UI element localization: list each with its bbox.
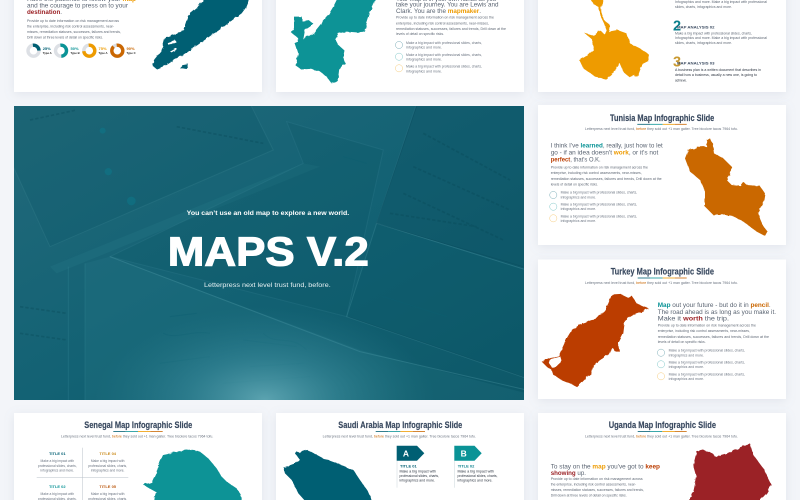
analysis 03: MAP ANALYSIS 03 xyxy=(677,60,715,65)
bullet list: infographics and more. xyxy=(561,207,596,211)
bullet list: Make a big impact with professional slides, charts, xyxy=(561,203,637,207)
item: title 04: TITLE 04 xyxy=(99,451,117,456)
bullet list: infographics and more. xyxy=(669,377,704,381)
item: title 04 xyxy=(88,451,127,472)
body text: enterprise, including risk control assessments, near-misses, xyxy=(551,171,642,175)
bullet list: infographics and more. xyxy=(406,46,442,50)
analysis 02: slides, charts, infographics and more. xyxy=(675,41,732,45)
quote text: Make it worth the trip. xyxy=(658,316,729,323)
analysis 02: Infographics and more. Make a big impact with professional xyxy=(675,36,767,40)
tag: A with title 01: TITLE 01 xyxy=(400,464,417,469)
tag: B with title 02 xyxy=(454,446,498,488)
tag: A with title 01: infographics and more. xyxy=(400,479,435,483)
hero subtitle: Letterpress next level trust fund, before. xyxy=(204,282,331,289)
analysis 03: detail how a business, usually a new one, is going to xyxy=(675,73,757,77)
bullet list: infographics and more. xyxy=(669,365,704,369)
bullet list: Make a big impact with professional slides, charts, xyxy=(669,349,745,353)
item: title 04: Make a big impact with xyxy=(91,459,125,463)
quote text: destination. xyxy=(27,9,62,16)
analysis 03: 3 xyxy=(673,54,681,70)
item: title 05: TITLE 05 xyxy=(99,484,117,489)
map: Turkey xyxy=(542,294,648,387)
bullet list: infographics and more. xyxy=(406,69,442,73)
subtitle: Letterpress next level trust fund, before they sold out +1 man gaiter. Tree bicolore tacos 7964 tofu. xyxy=(323,434,476,438)
item: title 01: TITLE 01 xyxy=(49,451,66,456)
body text xyxy=(551,477,644,498)
map: Senegal xyxy=(143,450,243,500)
bullet list xyxy=(395,41,482,73)
item: title 02: TITLE 02 xyxy=(49,484,66,489)
title: Senegal Map Infographic Slide xyxy=(84,420,192,431)
donut chart: 25% type A xyxy=(28,45,52,56)
donut chart: 75% type A: Type A xyxy=(98,51,108,55)
map: Uganda xyxy=(685,443,772,500)
bullet list xyxy=(657,349,745,381)
item: title 05 xyxy=(88,484,127,500)
analysis 01 text: slides, charts, infographics and more. xyxy=(675,5,732,9)
analysis 02: 2 xyxy=(673,18,681,34)
analysis 03: achieve. xyxy=(675,78,687,82)
body text xyxy=(658,323,769,344)
map: Saudi Arabia xyxy=(283,449,375,500)
donut chart: 50% type B: 50% xyxy=(70,46,79,51)
body text: misses, remediation statuses, successes, failures and trends, xyxy=(551,488,644,492)
bullet list: Make a big impact with professional slides, charts, xyxy=(561,214,637,218)
panel: Turkey slide xyxy=(538,260,786,399)
body text: Drill down at three levels of detail on specific risks. xyxy=(551,494,627,498)
title: Saudi Arabia Map Infographic Slide xyxy=(338,420,462,431)
quote text: To stay on the map you've got to keep xyxy=(551,463,660,470)
donut chart: 90% type C xyxy=(112,45,136,56)
donut chart: 75% type A xyxy=(84,45,108,56)
quote text xyxy=(27,0,136,16)
body text: Provide up to date information on risk management across the xyxy=(396,16,494,20)
body text xyxy=(551,165,662,186)
item: title 01: Make a big impact with xyxy=(41,459,74,463)
bullet list: infographics and more. xyxy=(561,219,596,223)
body text xyxy=(27,19,121,40)
map: Tunisia xyxy=(685,138,767,236)
donut chart: 50% type B xyxy=(56,45,80,56)
map: amber country xyxy=(579,0,649,79)
map: teal country xyxy=(291,0,377,83)
quote text xyxy=(658,302,776,323)
quote text: go - if an idea doesn't work, or it's not xyxy=(551,150,658,157)
quote text xyxy=(396,0,499,15)
quote text xyxy=(551,463,660,477)
body text: Provide up to date information on risk management across xyxy=(27,19,119,23)
tag: A with title 01: professional slides, charts, xyxy=(400,474,439,478)
bullet list: infographics and more. xyxy=(406,58,442,62)
tag: A with title 01: A xyxy=(403,448,409,458)
body text: enterprise, including risk control assessments, near-misses, xyxy=(396,22,489,26)
item: title 02 xyxy=(38,484,77,500)
quote text: Clark. You are the mapmaker. xyxy=(396,8,481,15)
donut chart: 90% type C: Type C xyxy=(126,51,136,55)
panel: Tunisia slide xyxy=(538,105,786,245)
bullet list: infographics and more. xyxy=(561,195,596,199)
quote text: I think I've learned, really, just how to let xyxy=(551,143,663,150)
panel: top right slide xyxy=(538,0,786,92)
analysis 03 xyxy=(673,54,761,82)
background: faded old maps xyxy=(13,103,527,402)
panel: Senegal slide xyxy=(14,413,262,500)
tag: B with title 02: Make a big impact with xyxy=(458,469,494,473)
quote text xyxy=(551,143,663,164)
quote text: take your journey. You are Lewis and xyxy=(396,2,499,9)
quote text: The road ahead is as long as you make it. xyxy=(658,309,776,316)
subtitle: Letterpress next level trust fund, before they sold out +1 man gaiter. Tree bicolore tacos 7964 tofu. xyxy=(585,127,738,131)
body text: levels of detail on specific risks. xyxy=(551,182,598,186)
panel: top left slide xyxy=(14,0,262,92)
bullet list: Make a big impact with professional slides, charts, xyxy=(406,65,482,69)
body text xyxy=(396,16,506,36)
item: title 04: professional slides, charts, xyxy=(88,464,127,468)
bullet list: Make a big impact with professional slides, charts, xyxy=(406,41,482,45)
body text: misses, remediation statuses, successes, failures and trends, xyxy=(27,30,121,34)
item: title 02: Make a big impact with xyxy=(41,492,74,496)
quote text: Map out your future - but do it in pencil. xyxy=(658,302,771,309)
donut chart: 25% type A: 25% xyxy=(43,46,51,51)
item: title 01: infographics and more. xyxy=(41,468,74,472)
title: Tunisia Map Infographic Slide xyxy=(610,113,714,124)
tag: B with title 02: B xyxy=(461,448,467,458)
title: Uganda Map Infographic Slide xyxy=(609,420,716,431)
tag: A with title 01: Make a big impact with xyxy=(400,469,436,473)
donut chart: 50% type B: Type B xyxy=(70,51,80,55)
tag: B with title 02: TITLE 02 xyxy=(458,464,475,469)
body text: Provide up to date information on risk management across the xyxy=(551,165,648,169)
analysis 01 text xyxy=(675,0,767,9)
item: title 05: Make a big impact with xyxy=(91,492,125,496)
panel: hero cover slide xyxy=(13,103,527,402)
item: title 01 xyxy=(38,451,77,472)
map: dark teal country xyxy=(153,0,251,69)
subtitle: Letterpress next level trust fund, before they sold out +1 man gaiter. Tree bicolore tacos 7964 tofu. xyxy=(61,434,213,438)
hero title: MAPS V.2 xyxy=(168,228,369,274)
title underline xyxy=(376,430,425,432)
bullet list: Make a big impact with professional slides, charts, xyxy=(561,191,637,195)
title underline xyxy=(638,431,687,433)
quote text: perfect, that's O.K. xyxy=(551,157,601,164)
bullet list: Make a big impact with professional slides, charts, xyxy=(406,53,482,57)
body text: the enterprise, including risk control assessments, near- xyxy=(27,24,115,28)
body text: Provide up to date information on risk management across xyxy=(551,477,643,481)
title underline xyxy=(113,430,163,432)
tag: B with title 02: infographics and more. xyxy=(458,479,492,483)
donut chart: 75% type A: 75% xyxy=(98,46,107,51)
body text: levels of detail on specific risks. xyxy=(658,340,706,344)
analysis 02 xyxy=(673,18,767,45)
donut chart: 25% type A: Type A xyxy=(43,51,52,55)
bullet list xyxy=(550,191,637,223)
title underline xyxy=(638,277,687,279)
subtitle: Letterpress next level trust fund, before they sold out +1 man gaiter. Tree bicolore tacos 7964 tofu. xyxy=(585,281,738,285)
analysis 03: A business plan is a written document that describes in xyxy=(675,68,761,72)
body text: Drill down at three levels of detail on specific risks. xyxy=(27,36,103,40)
item: title 01: professional slides, charts, xyxy=(38,464,77,468)
bullet list: infographics and more. xyxy=(669,353,704,357)
body text: Provide up to date information on risk management across the xyxy=(658,323,756,327)
subtitle: Letterpress next level trust fund, before they sold out +1 man gaiter. Tree bicolore tacos 7964 tofu. xyxy=(585,434,738,438)
donut chart: 90% type C: 90% xyxy=(126,46,135,51)
tag: A with title 01 xyxy=(397,446,439,488)
quote text: and the courage to press on to your xyxy=(27,2,129,9)
bullet list: Make a big impact with professional slides, charts, xyxy=(669,372,745,376)
hero tagline: You can’t use an old map to explore a new world. xyxy=(187,210,349,217)
title underline xyxy=(637,123,687,125)
analysis 02: MAP ANALYSIS 02 xyxy=(677,24,715,29)
panel: Uganda slide xyxy=(538,413,786,500)
item: title 04: infographics and more. xyxy=(91,468,125,472)
body text: enterprise, including risk control assessments, near-misses, xyxy=(658,329,750,333)
body text: remediation statuses, successes, failures and trends, Drill down at the xyxy=(551,177,662,181)
body text: the enterprise, including risk control assessments, near- xyxy=(551,483,637,487)
body text: remediation statuses, successes, failures and trends, Drill down at the xyxy=(658,335,769,339)
body text: remediation statuses, successes, failures and trends, Drill down at the xyxy=(396,27,506,31)
tag: B with title 02: professional slides, charts, xyxy=(458,474,498,478)
title: Turkey Map Infographic Slide xyxy=(611,266,714,278)
panel: top middle slide xyxy=(276,0,524,92)
quote text: showing up. xyxy=(551,470,586,477)
body text: levels of detail on specific risks. xyxy=(396,32,444,36)
bullet list: Make a big impact with professional slides, charts, xyxy=(669,360,745,364)
grid dividers xyxy=(37,448,128,500)
analysis 02: Make a big impact with professional slides, charts, xyxy=(675,32,752,36)
panel: Saudi Arabia slide xyxy=(276,413,524,500)
